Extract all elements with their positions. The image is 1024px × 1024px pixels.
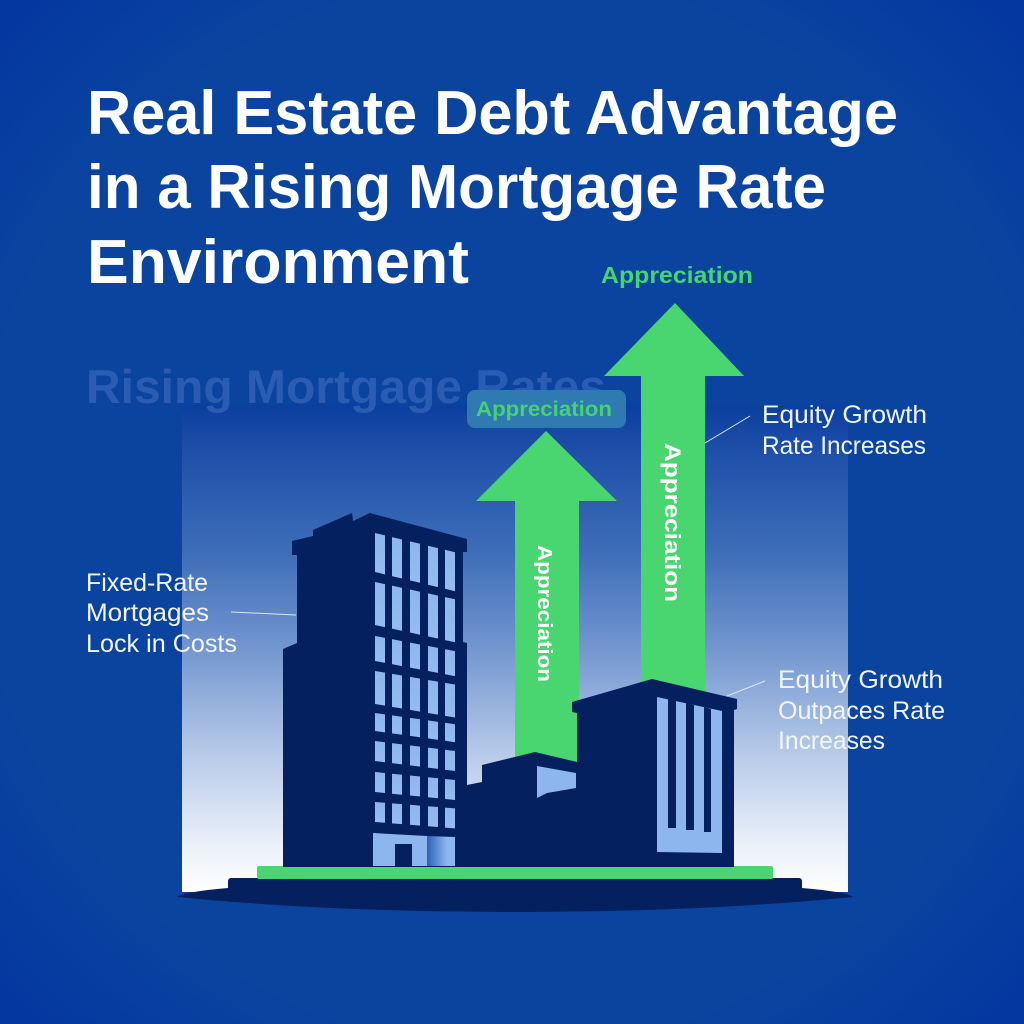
arrow: tall appreciation (604, 303, 744, 700)
heading: faded rising mortgage rates: Rising Mortgage Rates (86, 360, 606, 413)
heading: title: Environment (87, 228, 469, 297)
callout: fixed-rate mortgages: Fixed-Rate (86, 569, 208, 597)
heading: title: Real Estate Debt Advantage (87, 79, 898, 148)
green ground strip (257, 866, 773, 879)
heading: title: in a Rising Mortgage Rate (87, 153, 826, 222)
tower windows (375, 533, 455, 828)
base platform (177, 866, 853, 912)
callout: equity growth outpaces rate increases (727, 666, 945, 755)
tower entrance (373, 833, 455, 866)
pill label: appreciation: Appreciation (476, 398, 612, 421)
arrow: short appreciation (476, 431, 617, 770)
arrow label: tall: Appreciation (660, 443, 685, 602)
callout: fixed-rate mortgages (86, 569, 296, 658)
label: appreciation above tall arrow: Appreciation (601, 262, 753, 288)
low building window (537, 766, 576, 798)
arrow label: short: Appreciation (533, 545, 555, 682)
pill label: appreciation (467, 390, 626, 428)
right building windows (657, 697, 722, 853)
callout: equity growth outpaces rate increases: Outpaces Rate (778, 697, 945, 725)
callout: equity growth rate increases: Equity Growth (762, 401, 927, 429)
callout: fixed-rate mortgages: Mortgages (86, 599, 209, 627)
heading: title (87, 79, 898, 297)
faded panel: sky gradient (182, 405, 848, 892)
callout: fixed-rate mortgages: Lock in Costs (86, 630, 237, 658)
callout: equity growth rate increases: Rate Increases (762, 432, 926, 460)
callout: equity growth rate increases (705, 401, 927, 460)
callout: equity growth outpaces rate increases: Equity Growth (778, 666, 943, 694)
callout: equity growth outpaces rate increases: Increases (778, 727, 885, 755)
buildings silhouette (283, 513, 737, 867)
